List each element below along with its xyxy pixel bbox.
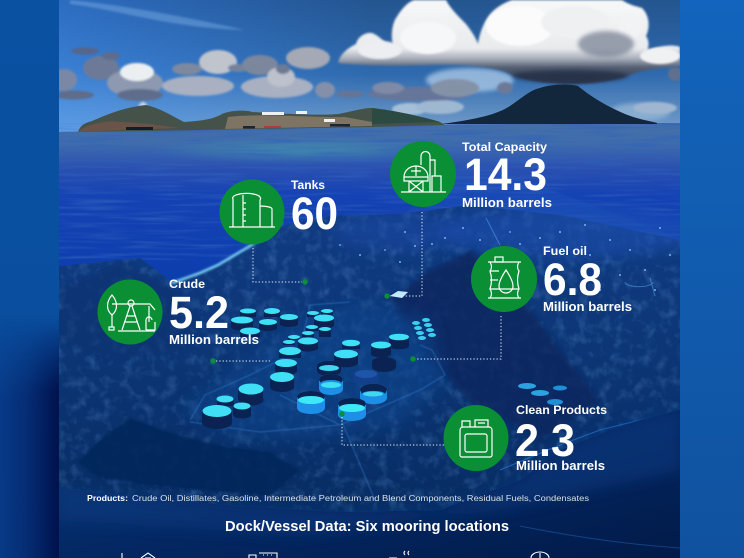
label: Crude (169, 277, 205, 291)
icon: bottom left (122, 553, 155, 558)
islands (78, 85, 657, 132)
small clouds (51, 47, 682, 118)
connector: fuel oil (410, 316, 501, 362)
connector: crude (210, 358, 270, 364)
stat: crude (98, 277, 259, 347)
land with terminal (59, 205, 680, 512)
connector: clean products (339, 411, 444, 445)
cropped bottom icons (122, 551, 549, 558)
stat: clean products (444, 403, 607, 473)
bottom water (59, 410, 680, 558)
dark rimmed tanks (297, 357, 396, 421)
icon: oil barrel (471, 246, 537, 312)
dock heading: Dock/Vessel Data: Six mooring locations (225, 519, 509, 535)
city lights (339, 224, 671, 291)
right side panel (680, 0, 744, 558)
unit: Million barrels (462, 195, 552, 210)
unit: Million barrels (169, 332, 259, 347)
storage tank farm (190, 302, 445, 500)
connector: total capacity (384, 212, 422, 299)
label: Tanks (291, 178, 325, 192)
label: Clean Products (516, 403, 607, 417)
sea (59, 123, 680, 282)
value: 6.8 (543, 254, 602, 305)
icon: storage tanks (220, 180, 284, 244)
stat: total capacity (390, 140, 552, 210)
connector: tanks (253, 248, 308, 285)
stat: tanks (220, 178, 338, 244)
unit: Million barrels (543, 299, 632, 314)
icon: refinery (390, 141, 456, 207)
products list: Products: (87, 494, 128, 503)
icon: oil pump (98, 280, 162, 344)
coastline glow (172, 222, 282, 283)
icon: jerry can (444, 405, 508, 471)
value: 14.3 (464, 149, 547, 200)
label: Fuel oil (543, 244, 587, 258)
value: 2.3 (515, 415, 575, 466)
large cumulus cloud (338, 0, 680, 84)
stat: fuel oil (471, 244, 632, 314)
unit: Million barrels (516, 458, 605, 473)
icon: bottom third (389, 551, 409, 558)
dark ridges (390, 250, 600, 440)
sky (59, 0, 680, 135)
value: 60 (291, 188, 338, 239)
label: Total Capacity (462, 140, 547, 154)
left side panel (0, 0, 59, 558)
value: 5.2 (169, 287, 229, 338)
icon: bottom second (249, 553, 277, 558)
icon: bottom clock (531, 552, 549, 558)
products list: Crude Oil, Distillates, Gasoline, Intermediate Petroleum and Blend Components, Residual Fuels, Condensates (132, 494, 589, 503)
